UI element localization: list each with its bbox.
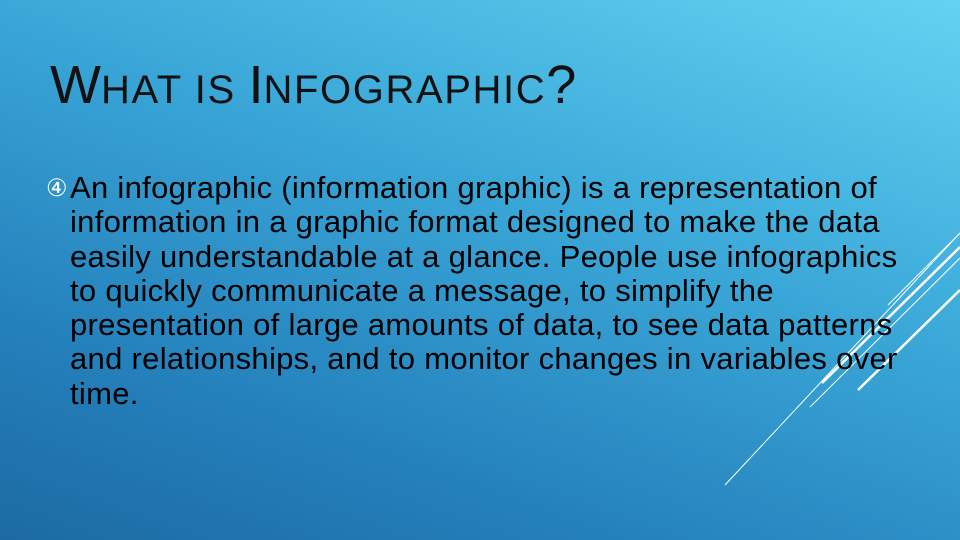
text block	[46, 170, 898, 411]
text block: presentation of large amounts of data, to see data patterns	[70, 307, 893, 342]
text block: An infographic (information graphic) is a representation of	[70, 170, 877, 205]
text: ④	[46, 175, 68, 202]
text block: to quickly communicate a message, to simplify the	[70, 273, 774, 308]
text block: and relationships, and to monitor changes in variables over	[70, 341, 898, 376]
text block: information in a graphic format designed to make the data	[70, 204, 880, 239]
text block: easily understandable at a glance. People use infographics	[70, 239, 897, 274]
text block: time.	[70, 376, 139, 411]
title: WHAT IS INFOGRAPHIC?	[50, 55, 576, 115]
